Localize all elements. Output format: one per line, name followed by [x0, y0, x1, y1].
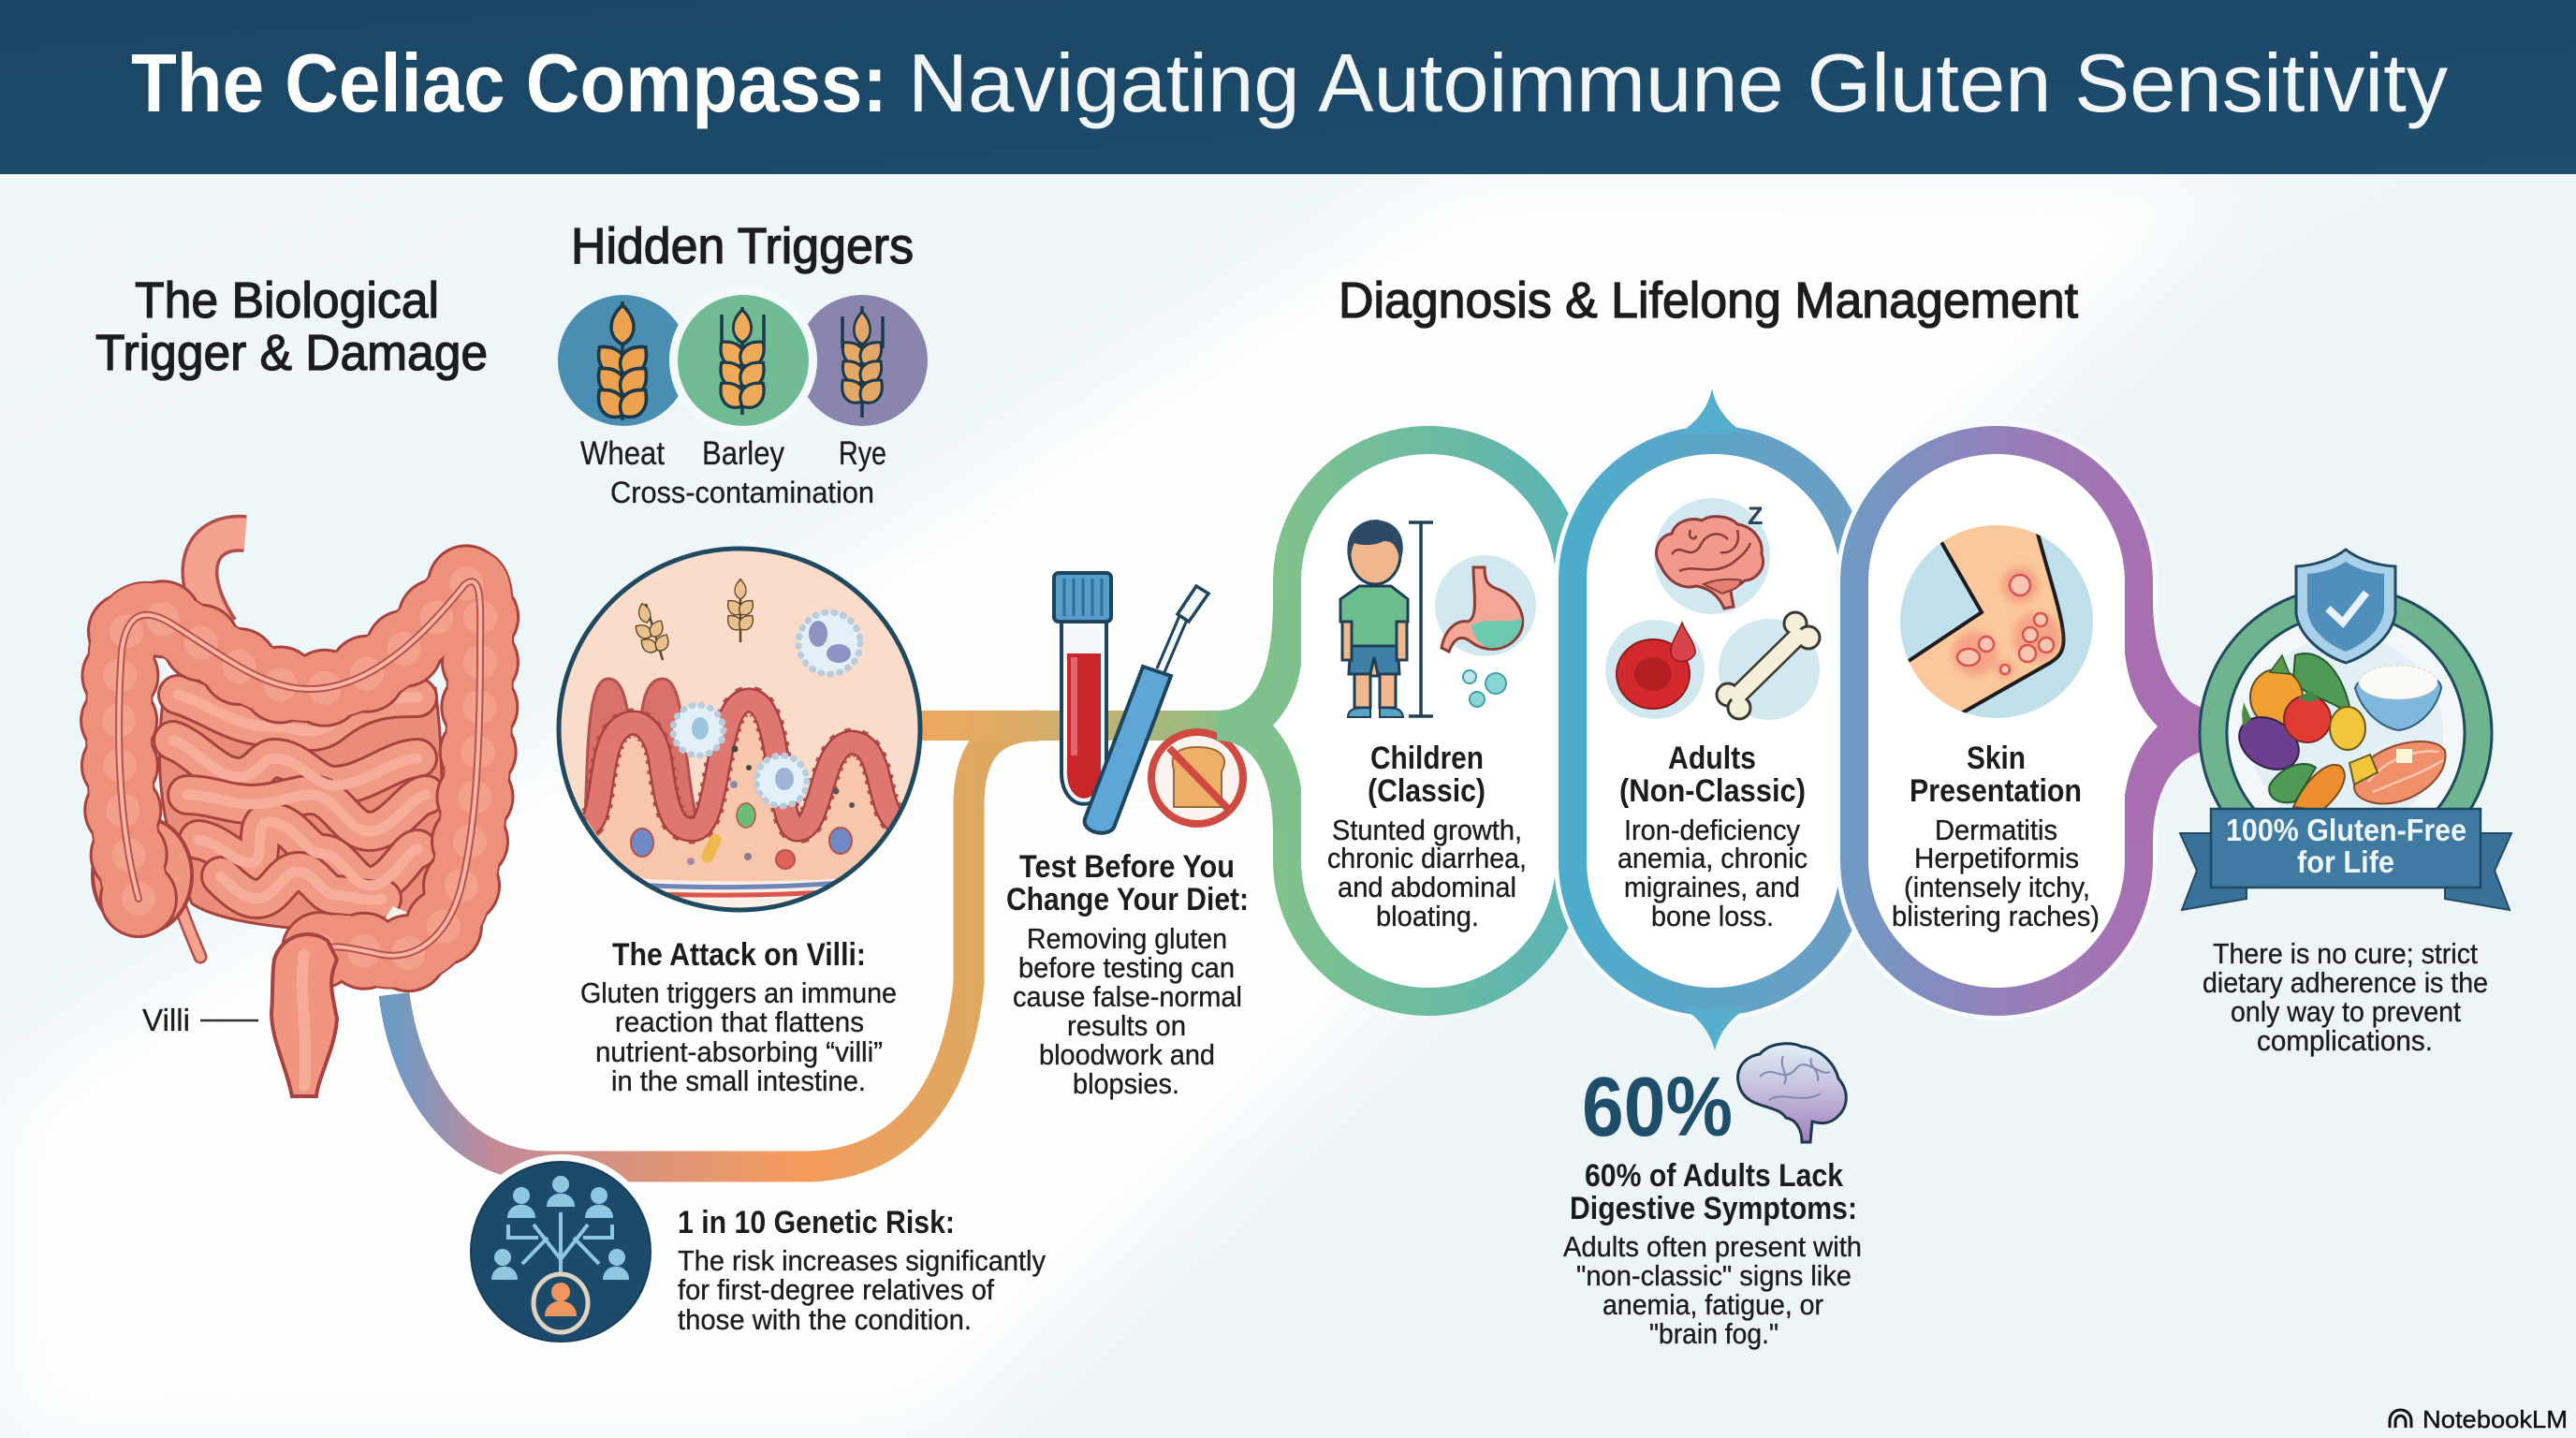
text: genetic risk: 1 in 10 Genetic Risk: [678, 1205, 955, 1240]
text: children classic: Children [1370, 741, 1484, 776]
panel: skin pill [1854, 440, 2218, 1002]
icon: bone [1717, 612, 1820, 720]
arrow: genetic flow path [394, 726, 1039, 1167]
icon: stomach [1435, 555, 1536, 707]
text: adults non-classic: bone loss. [1651, 900, 1774, 932]
text: no cure: only way to prevent [2231, 995, 2461, 1028]
text: children classic: Stunted growth, [1332, 814, 1522, 846]
text: 60 percent of adults: "non-classic" signs like [1576, 1259, 1852, 1292]
text: the attack on villi: nutrient-absorbing “villi” [595, 1035, 883, 1068]
text: skin presentation: Herpetiformis [1914, 842, 2079, 874]
arrow: top pointer [1681, 389, 1743, 433]
heading: hidden triggers: Hidden Triggers [571, 218, 914, 274]
text: adults non-classic: (Non-Classic) [1619, 773, 1806, 809]
text: skin presentation [1892, 741, 2100, 932]
esophagus-side tube [199, 534, 245, 629]
text: skin presentation: Skin [1967, 741, 2026, 776]
ribbon [2180, 809, 2511, 910]
label: rye: Rye [839, 435, 886, 472]
text: children classic: bloating. [1376, 900, 1479, 932]
text: adults non-classic: migraines, and [1624, 871, 1800, 903]
immune cells [673, 612, 860, 806]
icon: purple brain [1738, 1044, 1846, 1142]
text: test before diet: Removing gluten [1027, 922, 1227, 955]
text: adults non-classic: Iron-deficiency [1624, 814, 1800, 846]
text: genetic risk: The risk increases significantly [678, 1244, 1046, 1277]
text: test before diet: cause false-normal [1013, 980, 1242, 1013]
title bar [0, 0, 2576, 174]
text: children classic: (Classic) [1368, 773, 1486, 809]
text: 60 percent of adults [1563, 1158, 1862, 1350]
text: children classic [1327, 741, 1527, 932]
label: villi pointer [142, 1003, 258, 1037]
panel: children pill [1217, 440, 1570, 1002]
label: villi pointer: Villi [142, 1003, 190, 1037]
icon: blood test tube and swab [1054, 573, 1243, 833]
badge text: 100% Gluten-Free [2226, 813, 2466, 847]
text: 60 percent of adults: "brain fog." [1649, 1317, 1778, 1350]
label: cross-contamination: Cross-contamination [610, 476, 874, 509]
text: test before diet: bloodwork and [1039, 1038, 1215, 1071]
icon: rye [797, 295, 928, 426]
text: 60 percent of adults: Digestive Symptoms: [1570, 1191, 1857, 1226]
panel: grain icons [558, 286, 928, 509]
text: no cure: complications. [2257, 1024, 2433, 1057]
text: children classic: and abdominal [1338, 871, 1516, 903]
icon: barley [669, 286, 817, 434]
badge text: for Life [2297, 844, 2394, 879]
text: test before diet: Change Your Diet: [1006, 882, 1249, 917]
panel: adults pill [1573, 440, 1854, 1002]
text: 60 percent of adults: 60% of Adults Lack [1585, 1158, 1843, 1194]
label: wheat: Wheat [580, 435, 665, 472]
text: genetic risk: for first-degree relatives of [678, 1273, 994, 1306]
text: no cure: dietary adherence is the [2203, 966, 2488, 999]
text: children classic: chronic diarrhea, [1327, 842, 1527, 874]
heading: diagnosis: Diagnosis & Lifelong Management [1339, 272, 2078, 329]
icon: brain with z [1654, 498, 1770, 614]
text: no cure: There is no cure; strict [2213, 937, 2478, 970]
illustration: intestines [93, 534, 480, 1096]
icon: child with height ruler [1340, 520, 1433, 717]
icon: elbow with rash [1900, 525, 2093, 718]
wheat grains [632, 579, 757, 660]
stat: 60 percent: 60% [1582, 1061, 1733, 1154]
icon: shield check [2296, 550, 2395, 663]
text: the attack on villi [580, 937, 897, 1097]
text: test before diet [1006, 849, 1249, 1100]
text: genetic risk: those with the condition. [678, 1303, 972, 1336]
text: test before diet: results on [1067, 1009, 1186, 1042]
heading: biological trigger: Trigger & Damage [95, 325, 488, 381]
heading: biological trigger [95, 272, 488, 381]
logo: NotebookLM: NotebookLM [2422, 1405, 2568, 1433]
text: skin presentation: (intensely itchy, [1904, 871, 2090, 903]
text: adults non-classic: anemia, chronic [1617, 842, 1808, 874]
illustration: villi circle [558, 548, 922, 936]
food plate [2230, 636, 2445, 830]
icon: family genetics [463, 1154, 658, 1349]
text: 60 percent of adults: Adults often present with [1563, 1230, 1862, 1263]
title: The Celiac Compass: [131, 37, 887, 129]
text: test before diet: blopsies. [1073, 1067, 1179, 1100]
title: Navigating Autoimmune Gluten Sensitivity [908, 37, 2448, 129]
text: skin presentation: Presentation [1910, 773, 2082, 809]
text: test before diet: before testing can [1018, 951, 1235, 984]
arrow: path into diagnosis pills [913, 711, 1236, 741]
text: adults non-classic [1617, 741, 1808, 932]
label: barley: Barley [702, 435, 784, 472]
text: 60 percent of adults: anemia, fatigue, or [1603, 1288, 1823, 1321]
badge text [2226, 813, 2466, 879]
text: the attack on villi: in the small intestine. [611, 1064, 866, 1097]
text: test before diet: Test Before You [1019, 849, 1235, 885]
text: the attack on villi: reaction that flattens [615, 1005, 864, 1038]
text: skin presentation: blistering raches) [1892, 900, 2100, 932]
icon: wheat [558, 295, 689, 426]
text: no cure [2203, 937, 2488, 1057]
arrow: bottom pointer [1685, 1009, 1745, 1050]
text: skin presentation: Dermatitis [1935, 814, 2057, 846]
icon: gluten-free badge [2180, 550, 2511, 910]
text: adults non-classic: Adults [1668, 741, 1756, 776]
text: the attack on villi: Gluten triggers an immune [580, 976, 897, 1009]
icon: brain with z: Z [1748, 502, 1764, 530]
text: genetic risk [678, 1205, 1046, 1336]
text: the attack on villi: The Attack on Villi: [612, 937, 866, 973]
heading: biological trigger: The Biological [135, 272, 439, 329]
icon: red blood cell [1605, 620, 1705, 719]
